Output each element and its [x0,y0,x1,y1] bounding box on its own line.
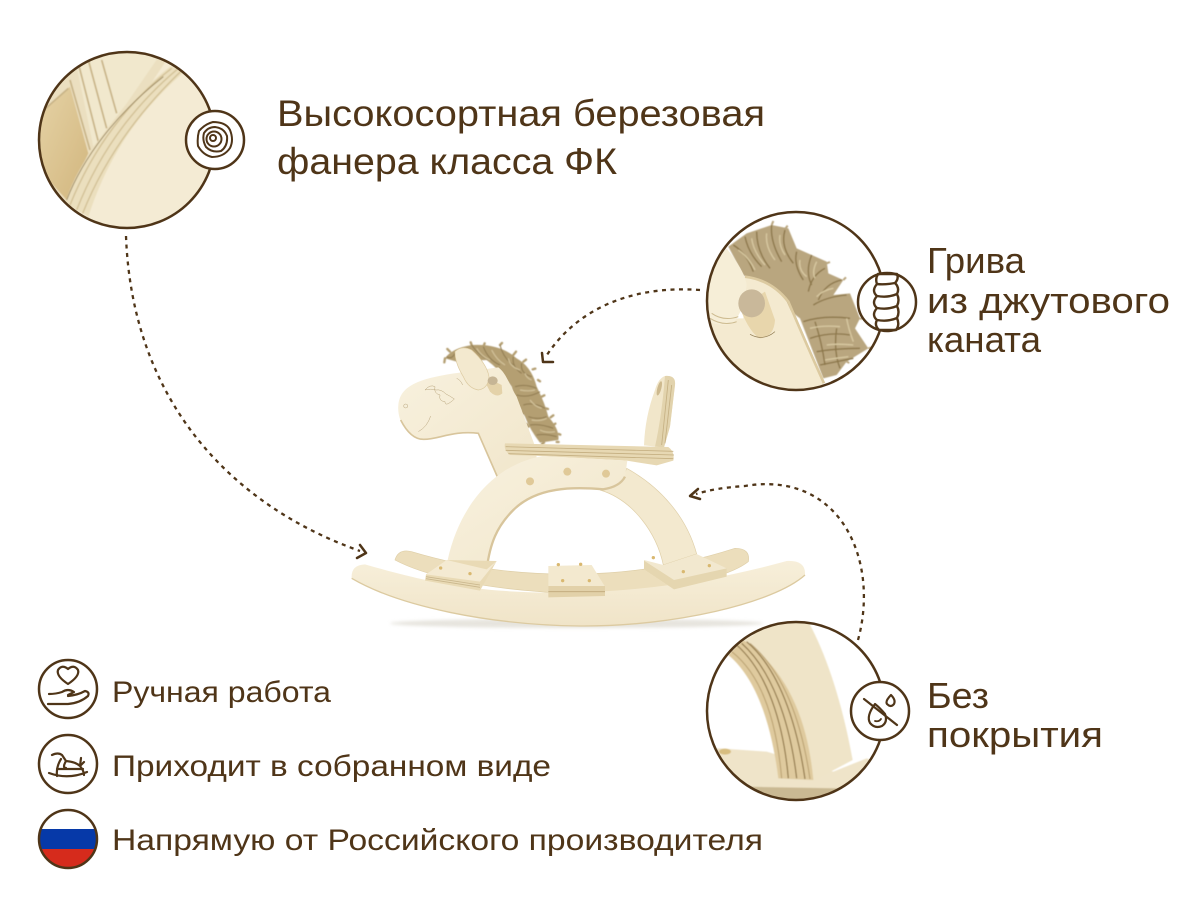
peg [740,292,775,338]
product photo: wooden rocking horse [352,342,805,628]
feature: comes assembled [39,735,551,793]
ply layers [728,640,813,780]
text: no coating heading [927,675,1103,755]
icon: wood rings [186,111,244,169]
horse head and neck [398,367,537,479]
text: plywood heading [277,93,765,182]
front rocker [352,561,805,626]
text: no coating heading: Без [927,675,989,716]
callout photo: uncoated wood arch close-up [706,620,881,802]
arrow: plywood callout to rocker [126,236,366,558]
arrow: mane callout to horse mane [542,289,700,362]
feature: handmade [39,660,331,718]
ear and peg [487,378,502,395]
feature: direct from Russian manufacturer: Напрямую от Российского производителя [112,824,763,857]
rear arch [600,468,697,565]
text: mane heading [927,240,1170,360]
text: no coating heading: покрытия [927,714,1103,755]
horse neck [711,277,823,389]
face engraving [404,378,463,432]
text: plywood heading: Высокосортная березовая [277,93,765,134]
callout photo: jute mane close-up [706,210,882,392]
feature: comes assembled: Приходит в собранном виде [112,750,551,783]
arrow: no coating callout to arch [690,484,864,640]
mane [444,342,560,444]
callout photo: birch plywood close-up [38,50,211,230]
text: plywood heading: фанера класса ФК [277,141,617,182]
icon: rope [858,273,916,331]
front arch [448,456,627,569]
plywood edge layers [65,67,190,217]
text: mane heading: из джутового [927,280,1170,321]
arch pegs [526,468,610,485]
feature: handmade: Ручная работа [112,676,331,709]
back rocker [395,548,749,594]
backrest [644,376,675,447]
arch face [744,623,853,772]
text: mane heading: каната [927,319,1042,360]
text: mane heading: Грива [927,240,1026,281]
base block [716,748,870,798]
foot blocks [425,560,497,591]
ear [708,248,745,318]
icon: no water drop [851,682,909,740]
feature: direct from Russian manufacturer [38,809,763,869]
floor shadow [390,619,763,628]
dark background wood [48,59,165,201]
seat [505,443,674,465]
jute rope fringe [728,221,872,378]
